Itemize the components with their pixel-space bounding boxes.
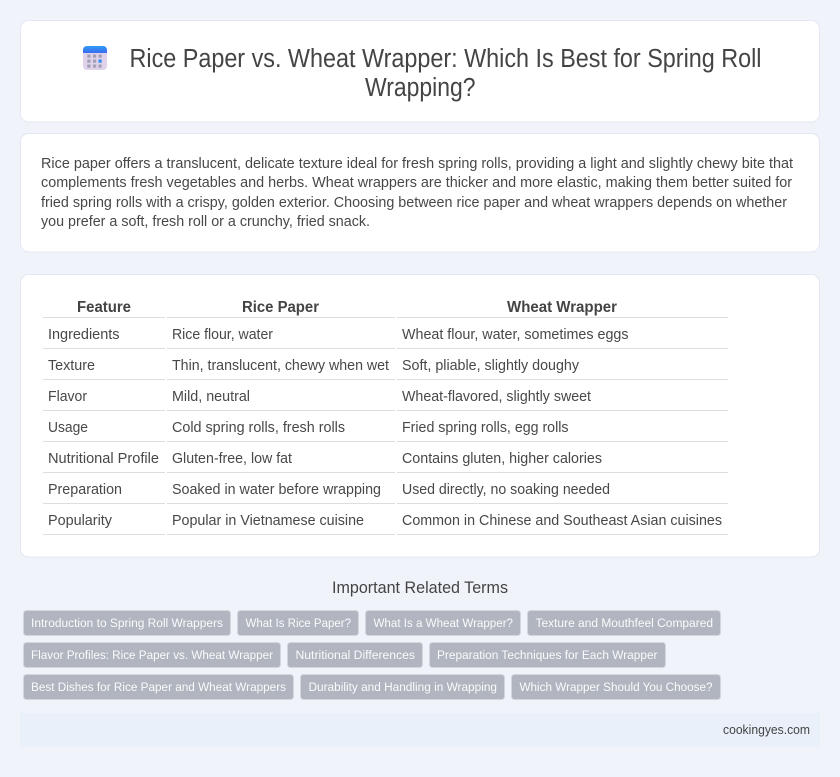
table row: usage: Usage <box>48 420 88 436</box>
table row: ingredients: Rice flour, water <box>172 327 273 343</box>
table row: texture: Soft, pliable, slightly doughy <box>402 358 580 374</box>
heading: related terms: Important Related Terms <box>332 579 508 597</box>
table row: popularity: Common in Chinese and Southeast Asian cuisines <box>402 513 722 529</box>
table header <box>77 299 617 316</box>
table row: nutritional profile <box>48 451 602 467</box>
table row: usage <box>48 420 568 436</box>
footer <box>20 713 820 747</box>
table row: texture: Texture <box>48 358 95 374</box>
footer: cookingyes.com <box>723 722 810 737</box>
text block: introduction: fried spring rolls with a crispy, golden exterior. Choosing between rice paper and wheat wrappers depends on whether <box>41 195 787 211</box>
title: Wrapping? <box>365 74 476 102</box>
table row: ingredients <box>48 327 628 343</box>
tag: What Is Rice Paper? <box>246 616 351 630</box>
table header: Feature <box>77 299 131 316</box>
table row: usage: Cold spring rolls, fresh rolls <box>172 420 345 436</box>
tag: Flavor Profiles: Rice Paper vs. Wheat Wrapper <box>31 648 273 662</box>
table header: Wheat Wrapper <box>507 299 617 316</box>
table row: nutritional profile: Gluten-free, low fat <box>172 451 292 467</box>
table row: ingredients: Ingredients <box>48 327 120 343</box>
panel: intro text card <box>20 134 820 252</box>
tag: Introduction to Spring Roll Wrappers <box>31 616 223 630</box>
tag <box>366 610 520 636</box>
table row: flavor: Mild, neutral <box>172 389 250 405</box>
table row: usage: Fried spring rolls, egg rolls <box>402 420 568 436</box>
tag <box>300 674 504 700</box>
table row: flavor: Flavor <box>48 389 87 405</box>
tag <box>238 610 358 636</box>
panel: comparison table card <box>20 274 820 557</box>
title <box>130 45 762 102</box>
tag <box>512 674 720 700</box>
table row: flavor <box>48 389 591 405</box>
text block: introduction <box>41 156 793 230</box>
table row: flavor: Wheat-flavored, slightly sweet <box>402 389 591 405</box>
icon: calendar <box>83 46 107 70</box>
table row: ingredients: Wheat flour, water, sometimes eggs <box>402 327 628 343</box>
table row: nutritional profile: Contains gluten, higher calories <box>402 451 602 467</box>
table header: Rice Paper <box>242 299 319 316</box>
tag <box>24 674 294 700</box>
text block: introduction: Rice paper offers a translucent, delicate texture ideal for fresh spring rolls, providing a light and slightly chewy bite that <box>41 156 793 172</box>
table row: popularity <box>48 513 722 529</box>
table row: nutritional profile: Nutritional Profile <box>48 451 159 467</box>
tag <box>528 610 720 636</box>
text block: introduction: you prefer a soft, fresh roll or a crunchy, fried snack. <box>41 214 370 230</box>
tag: Which Wrapper Should You Choose? <box>520 680 713 694</box>
table row: texture <box>48 358 580 374</box>
tag: Texture and Mouthfeel Compared <box>536 616 713 630</box>
table row: preparation <box>48 482 610 498</box>
tag: Preparation Techniques for Each Wrapper <box>437 648 658 662</box>
panel: title card <box>20 20 820 122</box>
title: Rice Paper vs. Wheat Wrapper: Which Is Best for Spring Roll <box>130 45 762 73</box>
tag <box>24 642 280 668</box>
table row: preparation: Used directly, no soaking needed <box>402 482 610 498</box>
tag <box>24 610 230 636</box>
tag: Durability and Handling in Wrapping <box>308 680 497 694</box>
tag <box>430 642 666 668</box>
tag <box>288 642 422 668</box>
table row: preparation: Preparation <box>48 482 122 498</box>
tag: Best Dishes for Rice Paper and Wheat Wrappers <box>31 680 286 694</box>
table row: popularity: Popularity <box>48 513 113 529</box>
tag: Nutritional Differences <box>296 648 415 662</box>
tag group: related terms <box>24 610 720 700</box>
table row: popularity: Popular in Vietnamese cuisine <box>172 513 364 529</box>
table row: preparation: Soaked in water before wrapping <box>172 482 381 498</box>
tag: What Is a Wheat Wrapper? <box>374 616 513 630</box>
text block: introduction: complements fresh vegetables and herbs. Wheat wrappers are thicker and more elastic, making them better suited for <box>41 175 792 191</box>
table row: texture: Thin, translucent, chewy when wet <box>172 358 389 374</box>
